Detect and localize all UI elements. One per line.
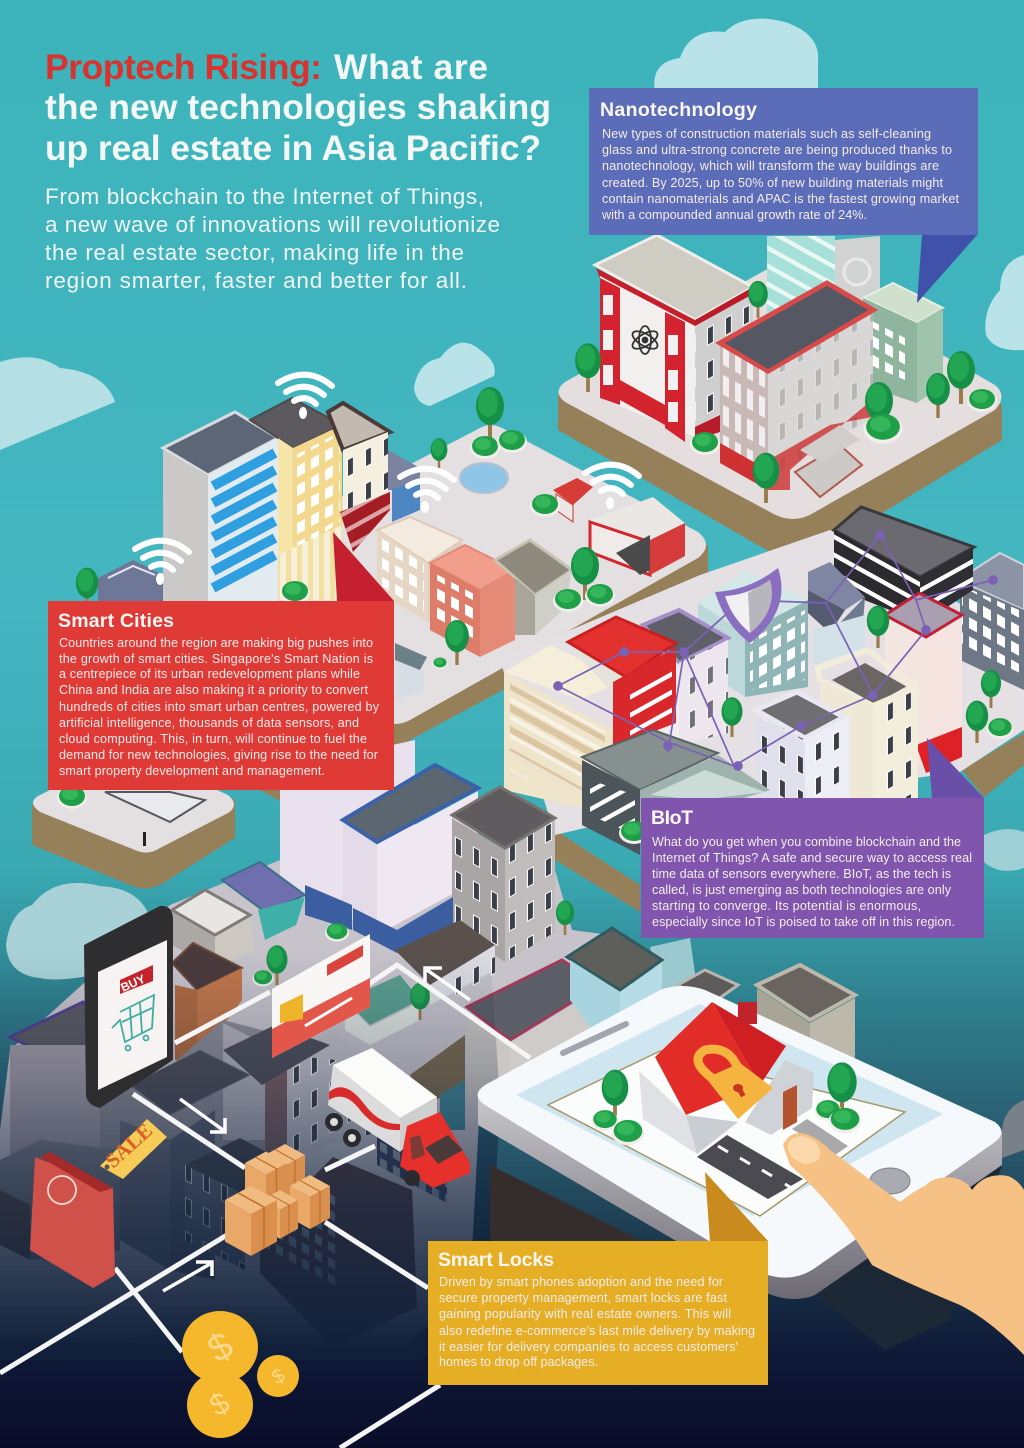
heading: smart cities: Smart Cities [58,610,174,632]
heading: nanotechnology: Nanotechnology [600,99,757,121]
platform: smart cities district [76,375,708,812]
red atom building [595,235,753,442]
beige building [818,650,918,805]
grey building behind tablet [678,970,738,1005]
body: smart locks: Driven by smart phones adoption and the need for [439,1275,723,1289]
body: nanotechnology: with a compounded annual growth rate of 24%. [601,208,867,222]
brown rear platform edge [410,1035,465,1108]
body: smart locks: secure property management, smart locks are fast [439,1291,728,1305]
title: up real estate in Asia Pacific? [45,128,541,168]
main pink-grey building [720,283,873,497]
icon: security shield [715,568,782,643]
heading: smart locks: Smart Locks [438,1249,554,1271]
road on tablet [697,1135,803,1199]
icon: wifi near square [400,469,454,512]
red striped building [568,617,676,747]
body: smart cities: hundreds of cities into smart urban centres, powered by [59,700,380,714]
right grey office [958,553,1024,690]
callout: nanotechnology [589,88,978,303]
body: smart cities: Countries around the region are making big pushes into [59,636,373,650]
dark striped building [582,730,770,855]
callout: smart locks [428,1172,768,1385]
body: smart locks: gaining popularity with real estate owners. This will [439,1307,731,1321]
icon: gold coins: $ [201,1324,240,1371]
icon: delivery truck [325,1048,470,1188]
icon: gold coins: $ [268,1365,289,1389]
back low blue building [98,560,193,606]
platform: small left island [32,750,235,888]
body: smart locks [439,1275,755,1369]
beige building behind tablet [757,965,855,1075]
body: nanotechnology: contain nanomaterials and APAC is the fastest growing market [602,192,960,206]
teal-roof house [345,975,420,1045]
body: smart cities: artificial intelligence, thousands of data sensors, and [59,716,359,730]
grey brick building [452,787,555,962]
blue glass tower [163,412,278,605]
pink-white tower [885,593,962,773]
cream apartment [377,517,462,622]
subtitle: a new wave of innovations will revolutionize [45,212,500,237]
blue U building [353,897,453,953]
black striped office [834,507,974,625]
icon: stacked parcels [225,1144,330,1256]
red kiosk [553,478,593,522]
small white arrows [163,968,470,1291]
title: the new technologies shaking [45,87,551,127]
teal gap under road [440,1080,465,1130]
body: nanotechnology: created. By 2025, up to 50% of new building materials might [602,176,944,190]
body: nanotechnology: New types of construction materials such as self-cleaning [602,127,931,141]
platform: nanotechnology district [558,235,1002,558]
icon: tablet [478,986,1002,1299]
lilac tower [280,740,478,935]
stone building behind bag [0,1140,120,1260]
icon: credit card [272,934,370,1058]
heading: BIoT: BIoT [651,807,693,829]
cloud: top right [654,19,818,92]
callout: smart cities [48,532,394,790]
home button [870,1168,910,1194]
body: smart cities [59,636,380,778]
body: BIoT: time data of sensors everywhere. BIoT, as the tech is [652,867,951,881]
title [45,47,551,168]
connecting white roads [0,965,530,1448]
depth shadow over lower city [0,950,500,1360]
grey shape at right edge [1002,1100,1024,1158]
buy button [119,965,153,995]
body: smart cities: the growth of smart cities. Singapore's Smart Nation is [59,652,373,666]
icon: cart [112,995,154,1050]
shingled house [395,920,495,1005]
body: BIoT: What do you get when you combine blockchain and the [652,835,961,849]
body: BIoT [652,835,972,929]
dark shadow beneath tablet [810,1165,1002,1350]
brown building [172,943,242,1060]
icon: pointing hand [783,1131,1024,1355]
subtitle: the real estate sector, making life in the [45,240,464,265]
body: smart cities: a centrepiece of its urban redevelopment plans while [59,667,360,681]
icon: smartphone with shopping cart [84,906,173,1108]
cloud: right edge [985,255,1024,350]
subtitle [45,184,500,293]
purple-roof building [643,610,728,745]
small blue shop [388,450,420,522]
back tower [767,236,880,315]
dark maroon building [260,1157,417,1347]
grey middle buildings [100,1020,385,1280]
icon: padlock [698,1049,773,1119]
brown left side [0,1190,30,1260]
title: What are [334,47,488,87]
icon: sale tag: SALE [100,1118,157,1173]
cream building [328,403,390,552]
teal shop [222,862,352,940]
yellow building [250,398,342,600]
body: BIoT: Internet of Things? A safe and secure way to access real [652,851,972,865]
cloud: centre [414,343,495,406]
cloud: lower right [984,829,1024,871]
body: smart locks: also redefine e-commerce's last mile delivery by making [439,1324,755,1338]
icon: gold coins: $ [204,1386,235,1423]
body: nanotechnology [601,127,960,222]
cloud: left [0,357,115,450]
grey-beige building [495,540,572,635]
salmon apartment [430,545,515,657]
icon: pool [460,463,508,493]
subtitle: From blockchain to the Internet of Things, [45,184,484,209]
brown underside beneath tablet [490,1165,640,1240]
icon: gold coins [182,1311,299,1438]
body: nanotechnology: nanotechnology, which will transform the way buildings are [602,159,939,173]
icon: wifi on low building [135,541,189,584]
body: smart locks: it easier for delivery companies to access customers' [439,1340,738,1354]
platform: lower city ground [0,860,640,1350]
white-grey shop [172,890,255,968]
platform: BIoT district [500,507,1024,912]
white-lilac building [756,692,850,800]
teal-blue building [567,928,662,1040]
teal-roof office [395,643,427,700]
body: smart locks: homes to drop off packages. [439,1355,598,1369]
icon: shopping bag [30,1152,115,1288]
pale teal office [698,570,808,697]
red and white store [590,497,685,575]
body: smart cities: cloud computing. This, in turn, will continue to fuel the [59,732,367,746]
icon: atom on red building [630,326,660,354]
tree beside lilac tower [266,945,288,985]
title: Proptech Rising: [45,47,322,87]
body: smart cities: demand for new technologies, giving rise to the need for [59,748,378,762]
icon: wifi on store [585,465,639,508]
blue-grey block [808,562,865,665]
cloud: pale patch right of city [650,938,697,990]
cream banded building [504,645,625,815]
body: smart cities: smart property development and management. [59,764,325,778]
subtitle: region smarter, faster and better for all. [45,268,467,293]
purple-roof left building [10,1002,110,1165]
icon: wifi on yellow building [278,375,332,418]
tablet screen trees [602,1070,628,1120]
buy button: BUY [119,972,147,995]
callout: BIoT [641,738,984,938]
body: nanotechnology: glass and ultra-strong concrete are being produced thanks to [602,143,952,157]
body: BIoT: called, is just emerging as both technologies are only [652,883,952,897]
green building [863,283,943,403]
body: BIoT: especially since IoT is poised to take off in this region. [652,915,955,929]
network lines and nodes [554,531,997,770]
cloud: lower left [6,883,150,980]
body: BIoT: starting to converge. Its potential is enormous, [652,899,921,913]
icon: house [639,1002,814,1154]
maroon-roof building [467,960,600,1100]
lower city buildings [0,740,855,1347]
navy window building [377,1130,447,1203]
body: smart cities: China and India are also making it a priority to convert [59,683,368,697]
